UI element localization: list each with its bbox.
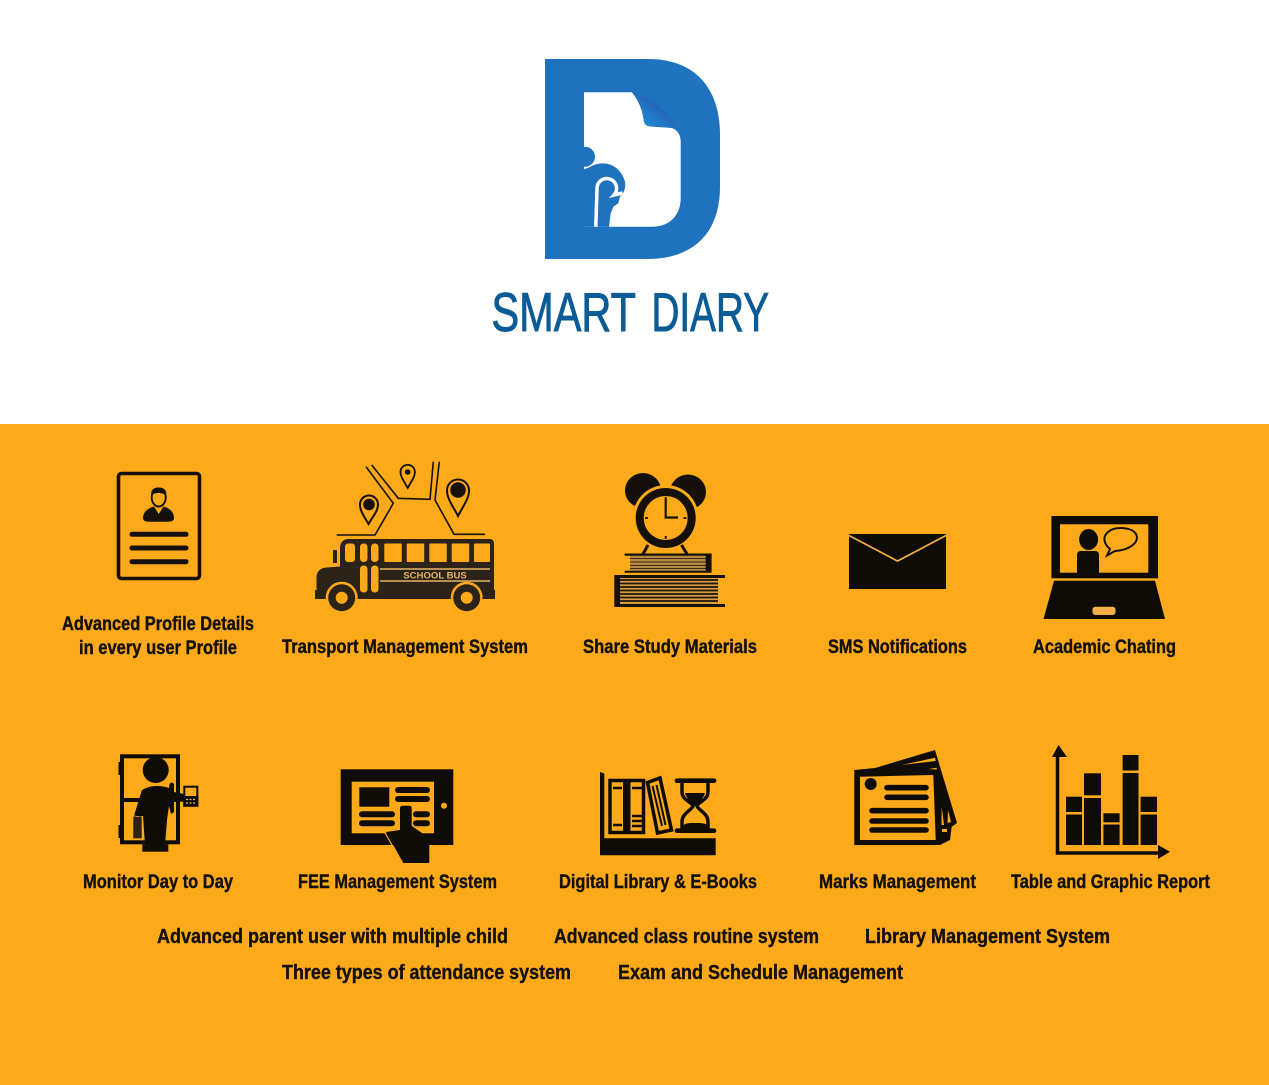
label: SMS Notifications xyxy=(828,637,967,658)
icon: laptop video chat xyxy=(1044,516,1165,619)
text block: additional features: Advanced class routine system xyxy=(554,925,819,948)
icon: stacked mark sheets xyxy=(854,750,957,845)
feature: table and graphic report xyxy=(1011,745,1211,893)
label: FEE Management System xyxy=(298,872,497,893)
label: Share Study Materials xyxy=(583,637,757,658)
feature: monitor day to day xyxy=(83,756,233,893)
text block: additional features: Exam and Schedule Management xyxy=(618,961,903,984)
label: Transport Management System xyxy=(282,637,528,658)
feature: digital library xyxy=(559,772,757,893)
feature: transport management xyxy=(282,462,528,658)
icon: alarm clock on books xyxy=(614,473,725,607)
text block: additional features: Library Management System xyxy=(865,925,1110,948)
label xyxy=(62,614,254,659)
label: Academic Chating xyxy=(1033,637,1176,658)
label: Table and Graphic Report xyxy=(1011,872,1211,893)
icon: tablet with pointing hand xyxy=(341,769,453,863)
panel: features background xyxy=(0,424,1269,1085)
feature: academic chatting xyxy=(1033,516,1176,658)
panel: logo header xyxy=(492,59,769,343)
label: Marks Management xyxy=(819,872,977,893)
title: SMART DIARY: SMART xyxy=(492,282,636,343)
feature: marks management xyxy=(819,750,977,893)
feature: fee management xyxy=(298,769,497,893)
label: Digital Library & E-Books xyxy=(559,872,757,893)
icon: bar chart with axes xyxy=(1052,745,1170,859)
icon: school bus with route pins xyxy=(315,462,495,614)
icon: person at door with attendance device xyxy=(118,756,198,852)
icon: profile card xyxy=(118,474,200,578)
text block: additional features: Advanced parent user with multiple child xyxy=(157,925,508,948)
icon: Smart Diary D logo xyxy=(545,59,720,259)
feature: share study materials xyxy=(583,473,757,658)
label: Advanced Profile Details xyxy=(62,614,254,635)
text block: additional features: Three types of attendance system xyxy=(282,961,571,984)
icon: school bus with route pins: SCHOOL BUS xyxy=(403,570,467,582)
feature: SMS notifications xyxy=(828,534,967,658)
label: Monitor Day to Day xyxy=(83,872,233,893)
title: SMART DIARY xyxy=(492,282,769,343)
title: SMART DIARY: DIARY xyxy=(652,282,769,343)
label: in every user Profile xyxy=(79,638,237,659)
icon: bookshelf and hourglass xyxy=(600,772,716,855)
text block: additional features xyxy=(157,925,1110,984)
icon: envelope xyxy=(849,534,946,589)
feature: profile details xyxy=(62,474,254,659)
